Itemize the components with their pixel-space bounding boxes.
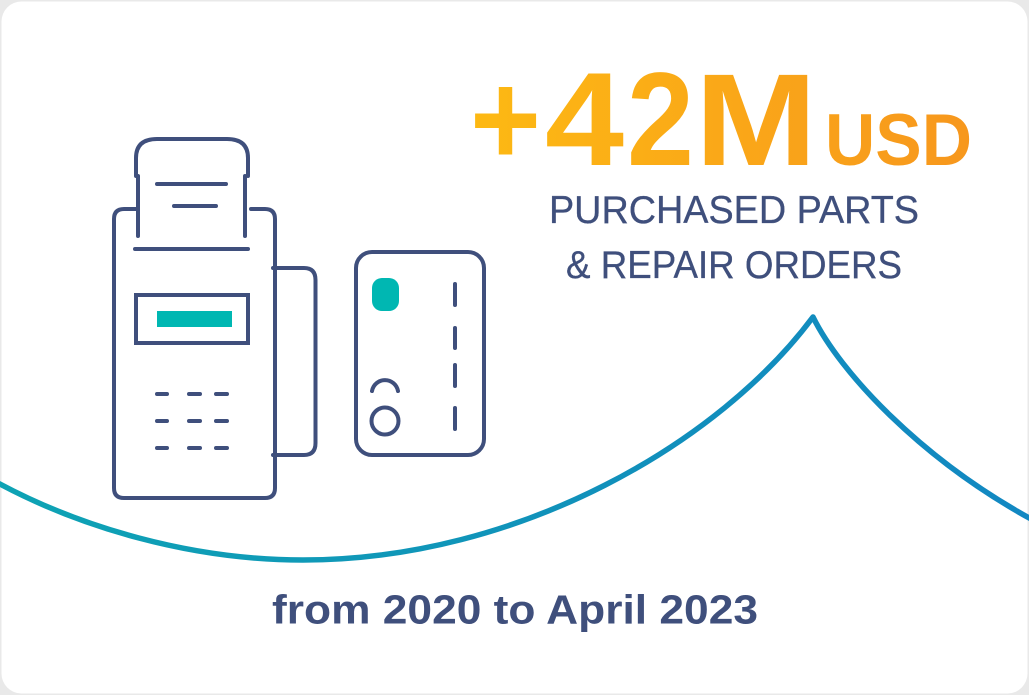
icon: terminal screen bar [157, 311, 232, 327]
subtitle [549, 189, 919, 287]
headline figure: 4 [545, 46, 624, 194]
subtitle: PURCHASED PARTS [549, 189, 919, 232]
headline figure: 2 [627, 46, 694, 194]
headline figure: M [695, 46, 817, 193]
icon: payment terminal [114, 139, 316, 498]
headline figure [470, 46, 972, 194]
subtitle: & REPAIR ORDERS [566, 244, 902, 287]
wave line chart [0, 317, 1029, 560]
headline figure: + [470, 46, 541, 194]
date range caption: from 2020 to April 2023 [272, 586, 758, 632]
headline figure: USD [825, 100, 972, 181]
icon: credit card [356, 252, 484, 455]
icon: card chip [372, 278, 399, 311]
